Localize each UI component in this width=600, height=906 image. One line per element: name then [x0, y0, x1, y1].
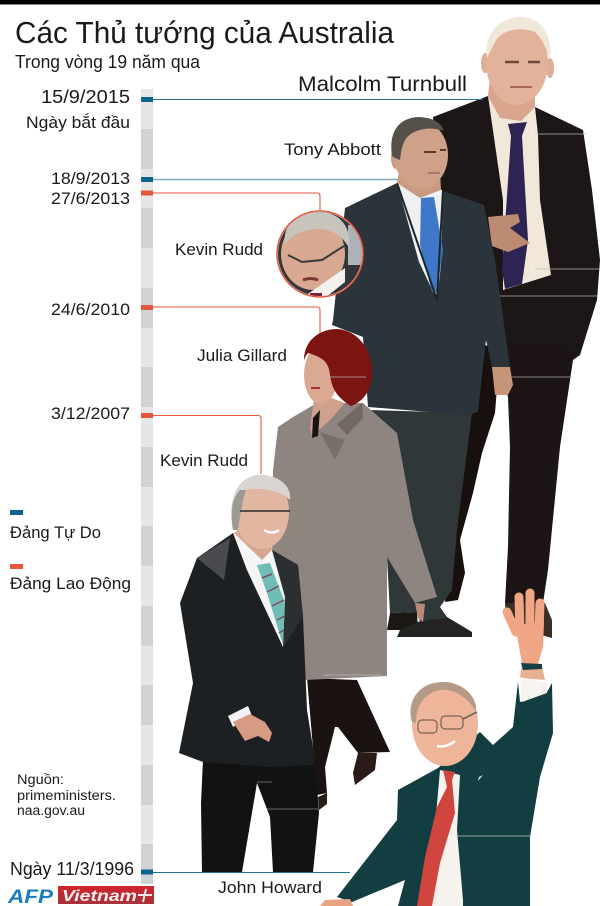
name: Tony Abbott: Tony Abbott — [284, 140, 381, 159]
name: John Howard: John Howard — [218, 878, 322, 897]
name: Julia Gillard: Julia Gillard — [197, 346, 287, 365]
source note: primeministers. — [17, 788, 116, 803]
source note — [17, 772, 116, 818]
date labels: 15/9/2015 — [41, 86, 130, 107]
name: Kevin Rudd second term: Kevin Rudd — [175, 240, 263, 259]
legend: Labor party: Đảng Lao Động — [10, 574, 131, 593]
name: Kevin Rudd first term: Kevin Rudd — [160, 451, 248, 470]
legend: Liberal party — [10, 510, 101, 542]
date labels: 18/9/2013 — [51, 169, 130, 188]
logo: Vietnam+: Vietnam — [62, 888, 137, 905]
timeline bar — [141, 89, 153, 884]
source note: naa.gov.au — [17, 803, 85, 818]
legend: Labor party — [10, 564, 131, 593]
date labels: 27/6/2013 — [51, 189, 130, 208]
figure: John Howard — [320, 593, 553, 906]
figure: Malcolm Turnbull — [433, 17, 600, 638]
figure: Tony Abbott — [332, 117, 513, 637]
circle portrait: Kevin Rudd — [277, 211, 364, 298]
title: Các Thủ tướng của Australia — [15, 15, 395, 50]
subtitle: Trong vòng 19 năm qua — [15, 52, 201, 72]
figure: Kevin Rudd standing — [179, 475, 319, 872]
logo: Vietnam+ — [58, 886, 154, 905]
connector lines — [153, 100, 483, 872]
date labels — [10, 86, 134, 879]
date labels: 3/12/2007 — [51, 404, 130, 423]
name: Malcolm Turnbull: Malcolm Turnbull — [298, 72, 467, 96]
date labels: 24/6/2010 — [51, 300, 130, 319]
date labels: Ngày bắt đầu — [26, 113, 130, 132]
legend: Liberal party: Đảng Tự Do — [10, 523, 101, 542]
figure: Julia Gillard — [272, 329, 437, 810]
timeline markers — [141, 97, 153, 874]
source note: Nguồn: — [17, 772, 64, 787]
date labels: Ngày 11/3/1996 — [10, 859, 134, 879]
